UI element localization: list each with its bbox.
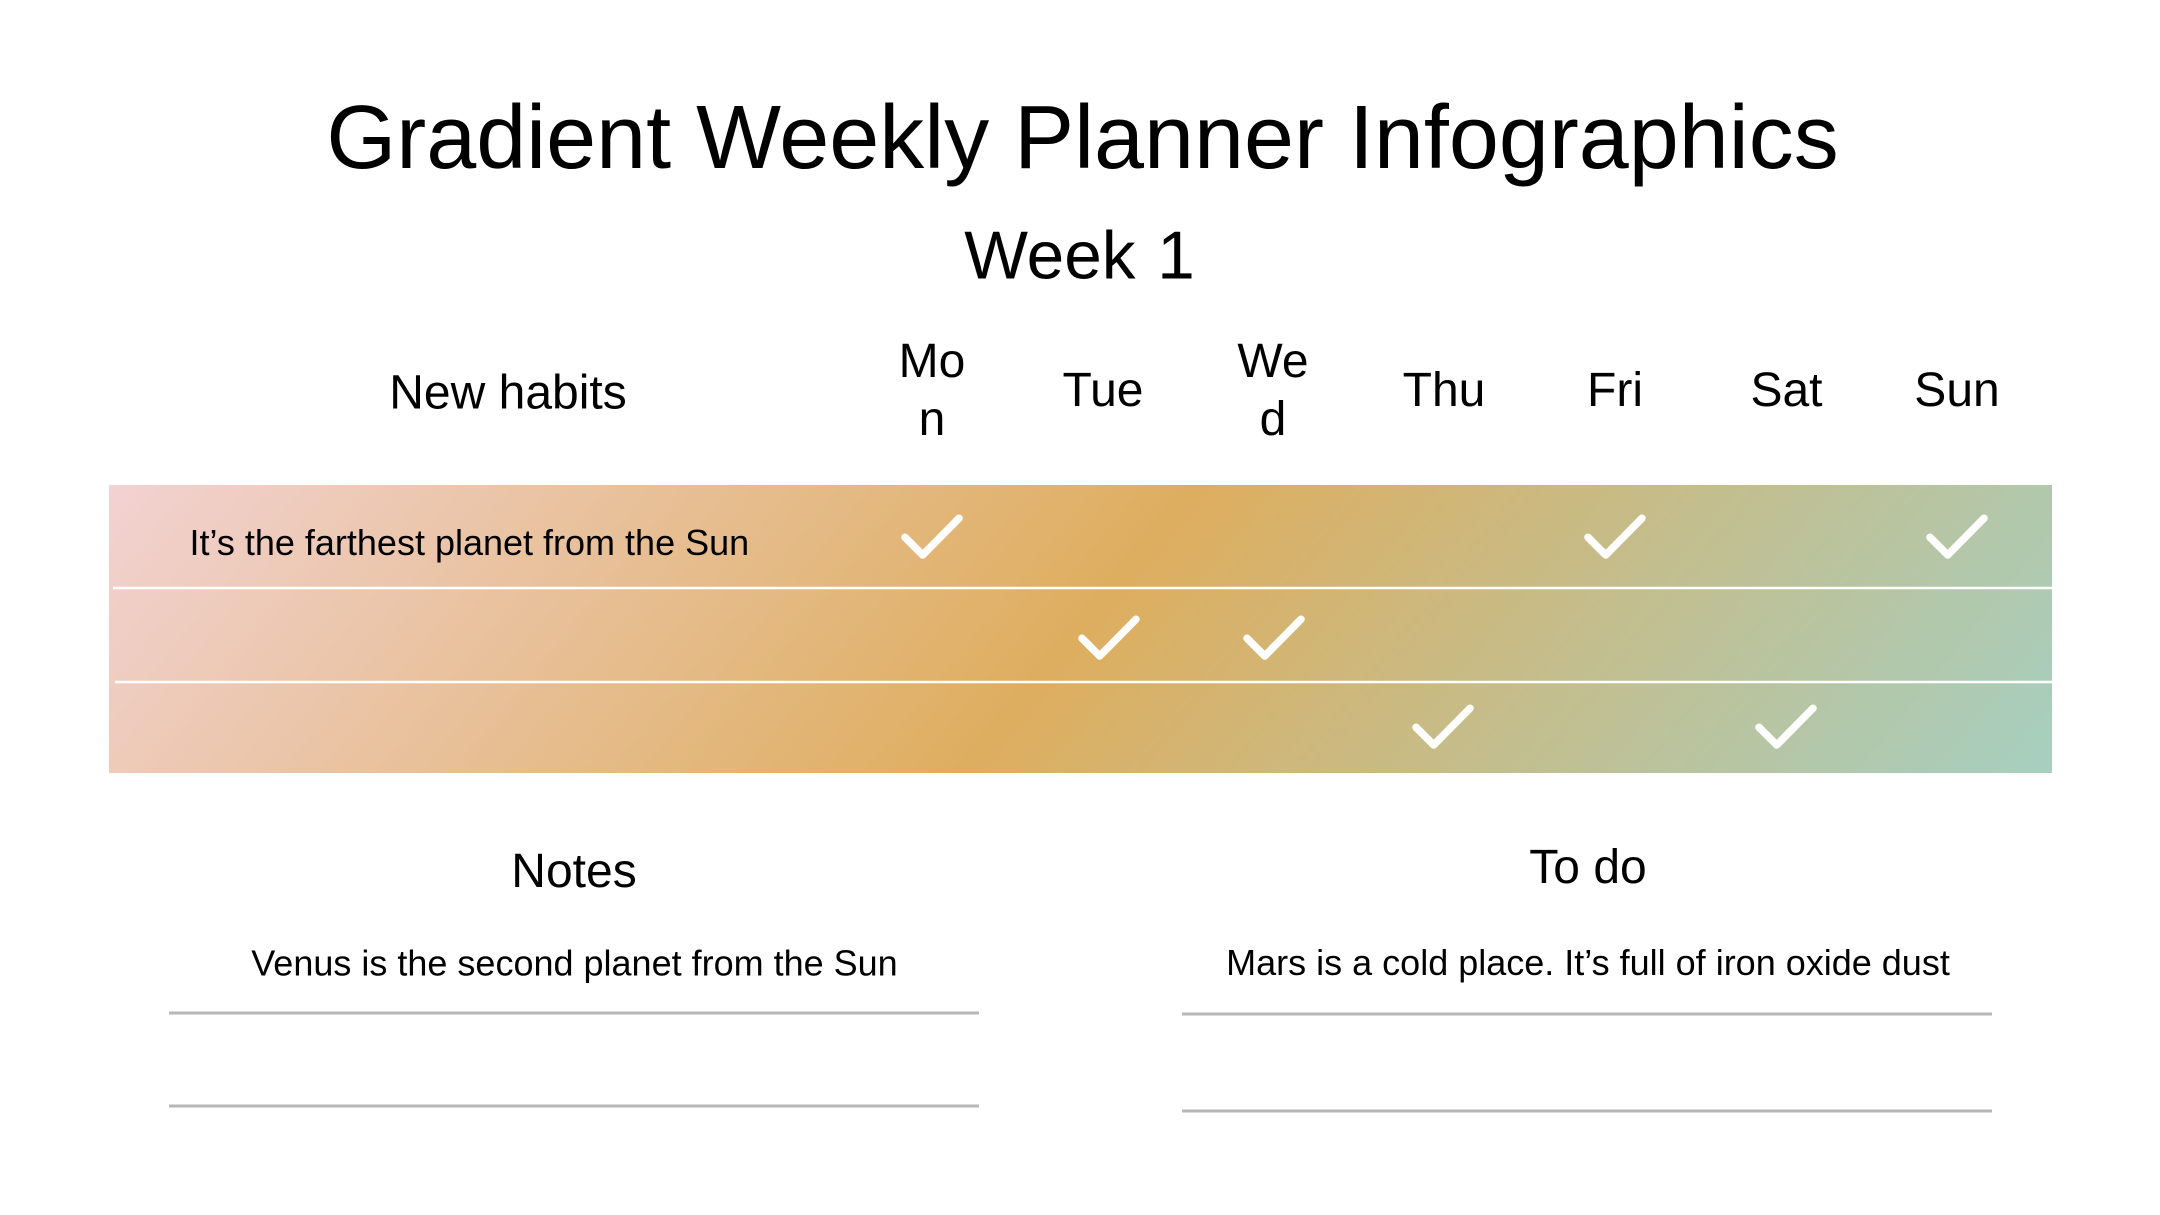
panel: notes [169, 845, 979, 1106]
day: Wednesday: We [1237, 335, 1309, 388]
title: Gradient Weekly Planner Infographics [326, 88, 1839, 188]
heading: to do: To do [1529, 841, 1647, 894]
row divider two [115, 681, 2052, 683]
check: row 3 Saturday [1759, 708, 1813, 745]
day: Monday: Mo [899, 335, 965, 388]
day: Thursday: Thu [1403, 364, 1485, 417]
to do text: Mars is a cold place. It’s full of iron oxide dust [1226, 942, 1950, 983]
notes line one [169, 1012, 979, 1014]
to do line one [1182, 1012, 1992, 1016]
heading: new habits: New habits [389, 366, 627, 420]
weekday headers [899, 335, 2000, 446]
subtitle: week number: Week 1 [964, 218, 1195, 294]
notes line two [169, 1104, 979, 1108]
day: Saturday: Sat [1750, 364, 1823, 417]
gradient background [109, 485, 2052, 773]
check: row 1 Sunday [1930, 518, 1984, 555]
check: row 1 Monday [905, 518, 959, 555]
check: row 2 Wednesday [1247, 619, 1301, 656]
day: Friday: Fri [1587, 364, 1643, 417]
check: row 2 Tuesday [1082, 619, 1136, 656]
panel: to do [1182, 841, 1992, 1111]
day: Monday: n [919, 393, 945, 446]
habit label: It’s the farthest planet from the Sun [190, 522, 749, 563]
heading: notes: Notes [511, 845, 637, 898]
check: row 3 Thursday [1416, 708, 1470, 745]
day: Wednesday: d [1260, 393, 1286, 446]
notes text: Venus is the second planet from the Sun [251, 942, 898, 984]
row divider one [113, 587, 2052, 589]
day: Tuesday: Tue [1063, 364, 1143, 417]
check: row 1 Friday [1588, 518, 1642, 555]
day: Sunday: Sun [1914, 364, 2000, 417]
to do line two [1182, 1110, 1992, 1112]
panel: habit tracker gradient band [109, 485, 2052, 773]
